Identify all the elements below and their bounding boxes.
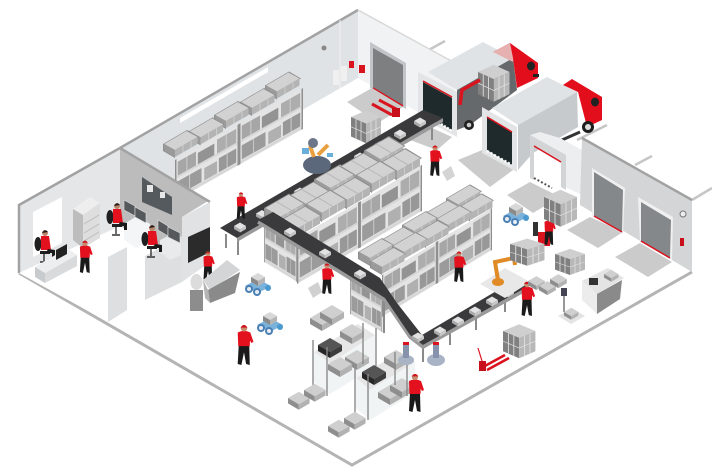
window [33, 197, 62, 257]
shelving row: back wall [163, 72, 303, 201]
red robot arm [460, 80, 480, 105]
truck 2 [492, 77, 602, 170]
worker between shelves [454, 252, 466, 282]
woman at desk [80, 241, 93, 273]
back right wall with door [349, 10, 455, 130]
back left wall [120, 10, 358, 222]
low pallet upper [310, 305, 344, 331]
right wall with doors [580, 138, 692, 272]
worker walking [238, 325, 253, 365]
blue AGV 2 [257, 312, 283, 335]
worker with scanner [409, 374, 424, 412]
worker at conveyor [237, 192, 247, 219]
parcel scale [558, 288, 585, 324]
office floor [19, 226, 182, 322]
truck 1 [428, 42, 539, 130]
bollards [398, 342, 445, 366]
operator desk 2 [142, 220, 181, 260]
low pallets right [528, 274, 567, 295]
dock door 1 [418, 72, 480, 137]
pallet stack near door [351, 111, 381, 143]
pallet stacks right [510, 190, 585, 275]
orange robot arm [480, 258, 530, 298]
truck 1 cargo [478, 65, 510, 102]
table with printer [582, 268, 624, 314]
pallet jack foreground [478, 348, 509, 371]
blue AGV right [503, 203, 529, 226]
worker at conveyor end [522, 282, 535, 316]
conveyor A [220, 110, 443, 255]
blue AGV 1 [245, 273, 271, 296]
central shelving block [264, 136, 422, 284]
pallet stack foreground [503, 324, 535, 358]
wire rack 1 [313, 323, 376, 396]
reception desk [203, 251, 240, 303]
office side wall [19, 148, 120, 273]
office end wall with key rack [182, 202, 210, 282]
loading pads [347, 88, 672, 277]
dock door 3 [530, 132, 582, 195]
filing cabinet [73, 197, 100, 248]
wire rack 2 [355, 350, 415, 420]
operator desk 1 [106, 200, 150, 248]
central robot [302, 138, 333, 174]
office back wall [120, 148, 210, 262]
dock door 2 [482, 107, 517, 172]
manager desk [34, 230, 77, 283]
office partition wall [108, 236, 182, 322]
water cooler [190, 274, 203, 311]
worker with cart [308, 264, 334, 298]
lower right shelving block [350, 184, 494, 332]
low pallets foreground [288, 384, 366, 438]
worker on pallet truck [533, 216, 556, 246]
worker with cart near dock [430, 146, 455, 181]
pallet jack near door [372, 100, 400, 117]
conveyor B and C [258, 212, 527, 362]
notice board [142, 177, 172, 215]
